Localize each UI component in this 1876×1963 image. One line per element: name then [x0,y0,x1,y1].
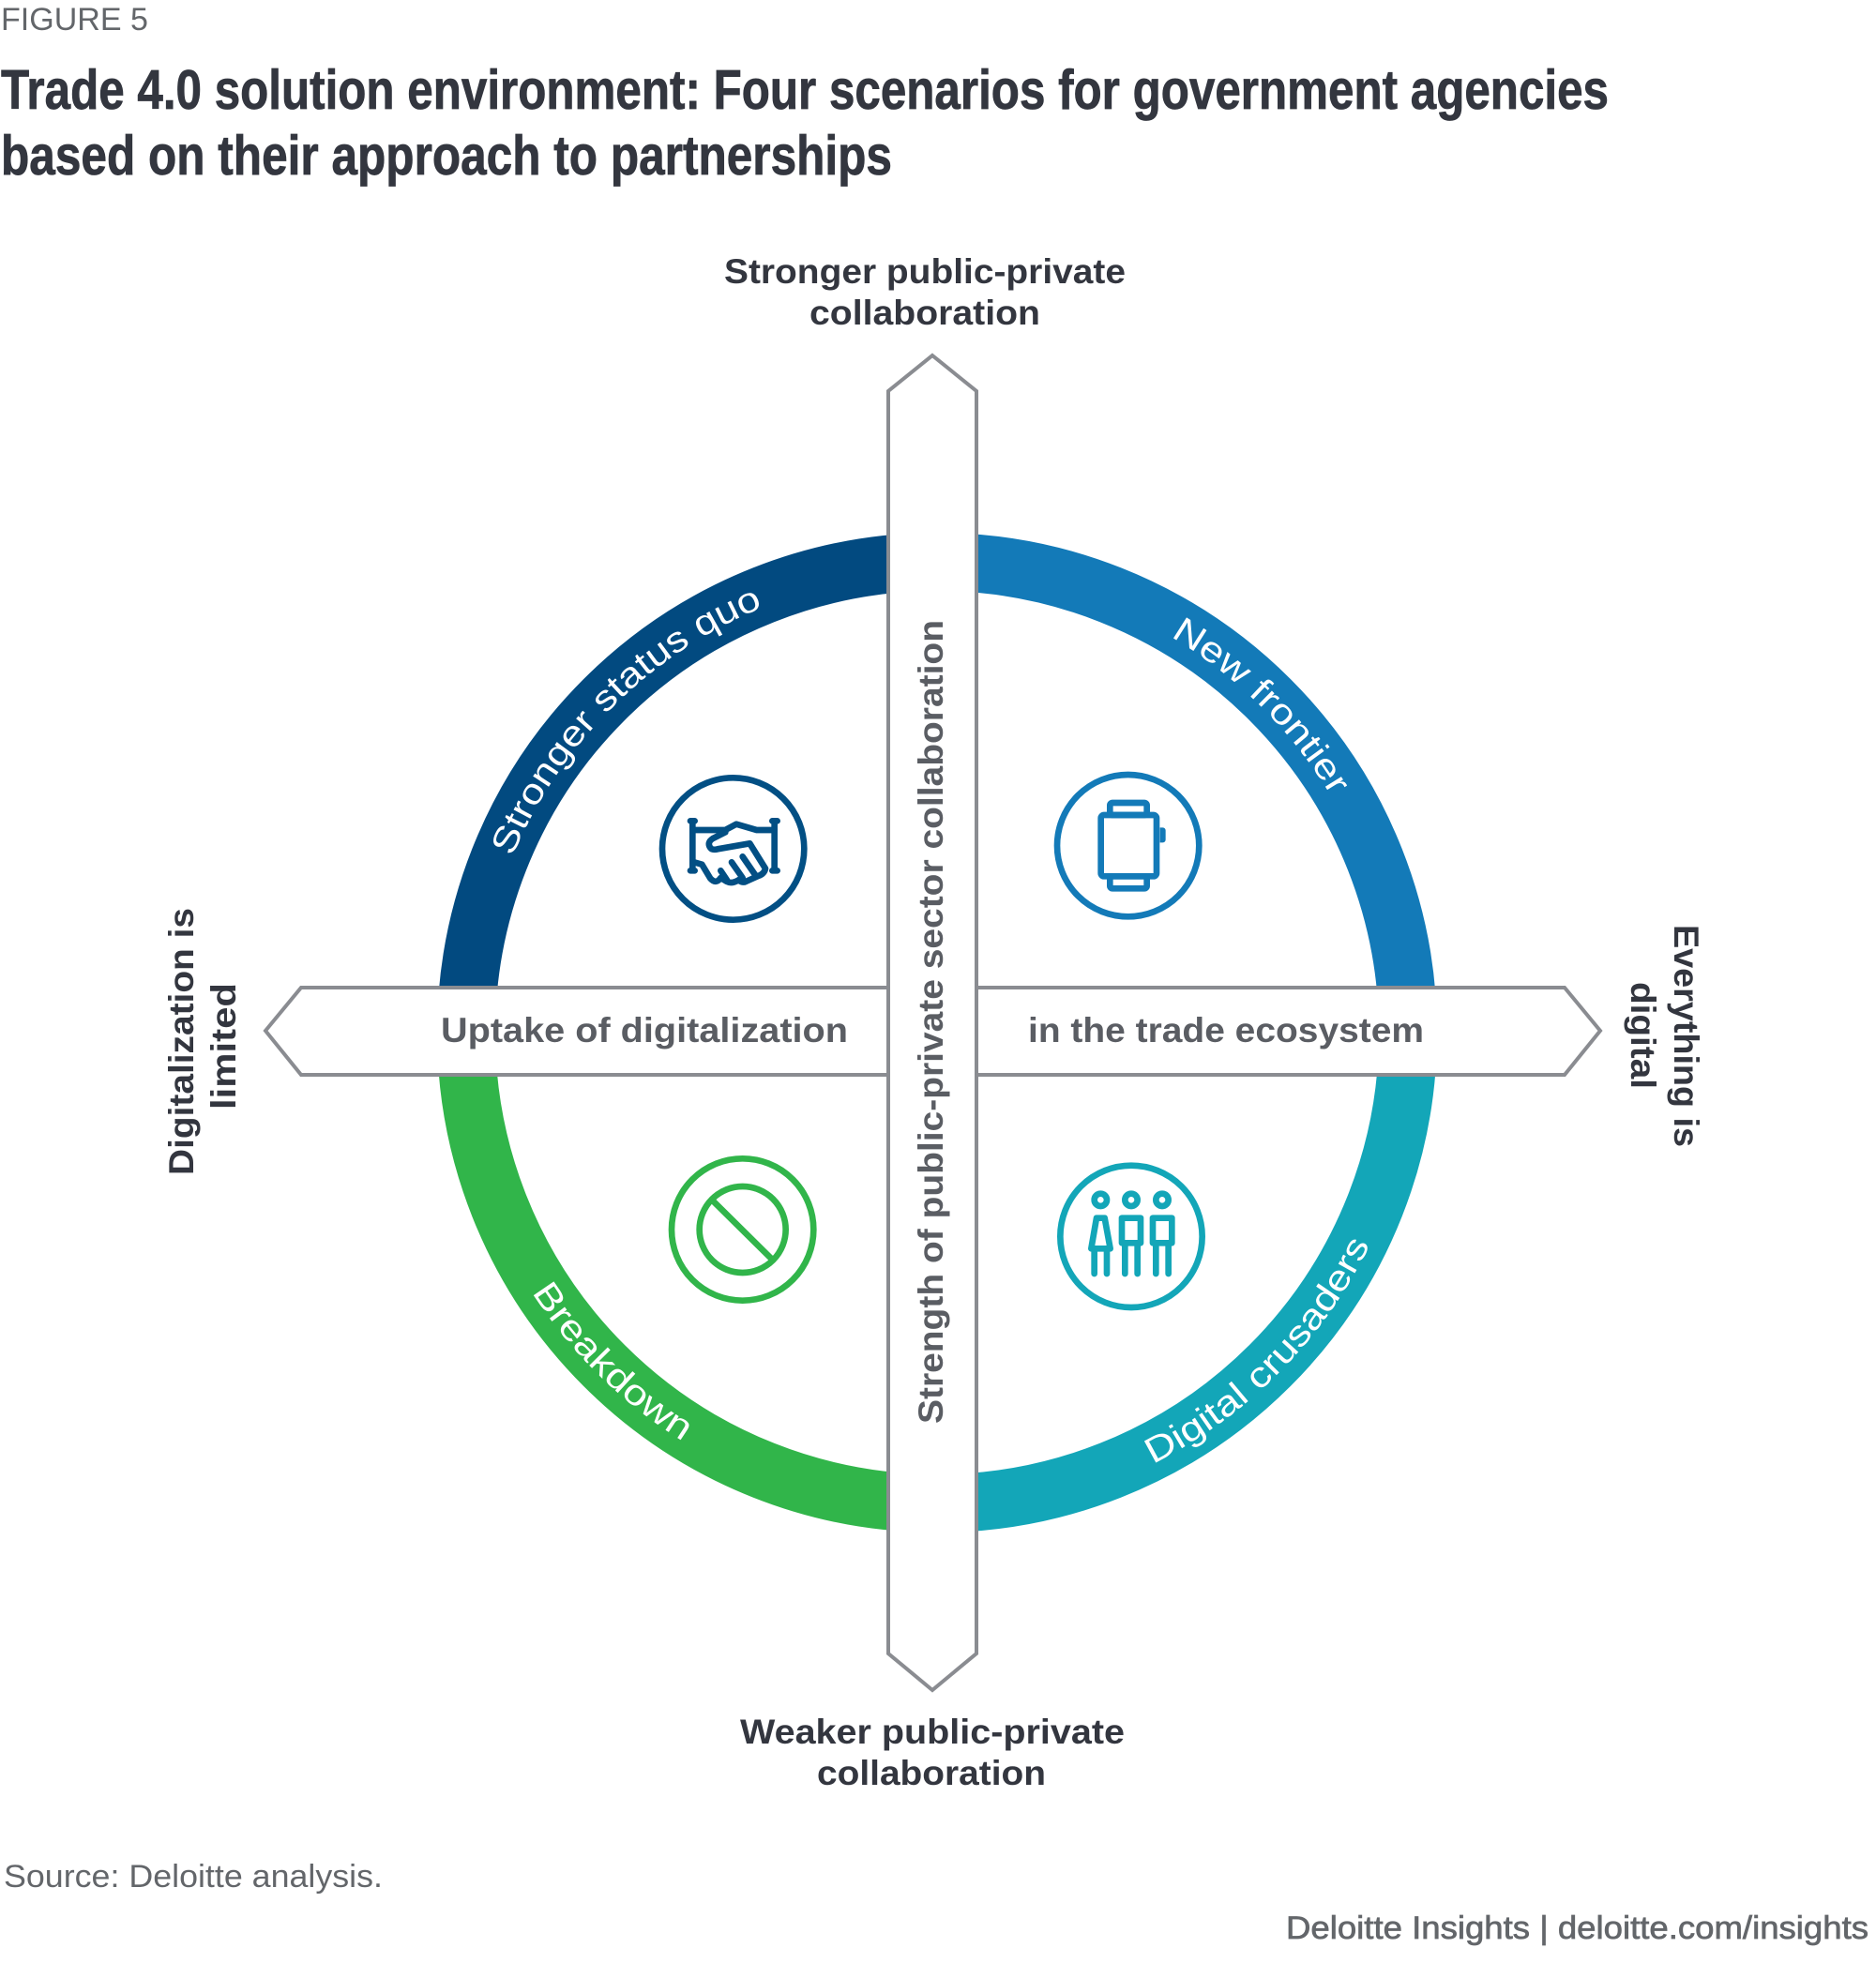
quadrant: digital crusaders [937,1033,1408,1503]
right axis end label: Everything is [1667,925,1705,1147]
left axis end label [162,908,243,1175]
ring quadrants [466,562,1408,1503]
top axis end label [724,252,1126,332]
quadrant: stronger status quo [466,562,937,1033]
bottom axis end label: collaboration [817,1754,1046,1792]
figure label: FIGURE 5 [1,2,148,38]
icon: three people [1060,1166,1203,1307]
horizontal axis label right: in the trade ecosystem [1028,1011,1424,1049]
right axis end label: digital [1624,982,1662,1089]
icon: prohibition sign [672,1158,813,1301]
top axis end label: Stronger public-private [724,252,1126,291]
source note: Source: Deloitte analysis. [4,1859,383,1895]
scenario label: Digital crusaders: Digital crusaders [1144,1240,1368,1463]
credit line: Deloitte Insights | deloitte.com/insights [1286,1910,1868,1946]
title: based on their approach to partnerships [1,125,892,187]
top axis end label: collaboration [809,294,1040,332]
scenario label: Breakdown: Breakdown [533,1281,688,1441]
scenario label: New frontier: New frontier [1173,617,1347,790]
vertical axis label: Strength of public-private sector collaboration [912,620,950,1424]
title: Trade 4.0 solution environment: Four scenarios for government agencies [1,59,1609,121]
horizontal axis arrow [265,988,1600,1075]
horizontal axis label left: Uptake of digitalization [441,1011,848,1049]
quadrant: breakdown [466,1033,937,1503]
left axis end label: Digitalization is [162,908,201,1175]
title [1,59,1609,187]
right axis end label [1624,925,1705,1147]
bottom axis end label: Weaker public-private [740,1713,1125,1751]
scenario label: Stronger status quo: Stronger status quo [493,593,759,853]
vertical axis arrow [888,355,976,1690]
bottom axis end label [740,1713,1125,1792]
icon: smartwatch [1057,775,1199,916]
quadrant: new frontier [937,562,1408,1033]
icon: handshake [662,778,804,920]
left axis end label: limited [204,983,243,1110]
